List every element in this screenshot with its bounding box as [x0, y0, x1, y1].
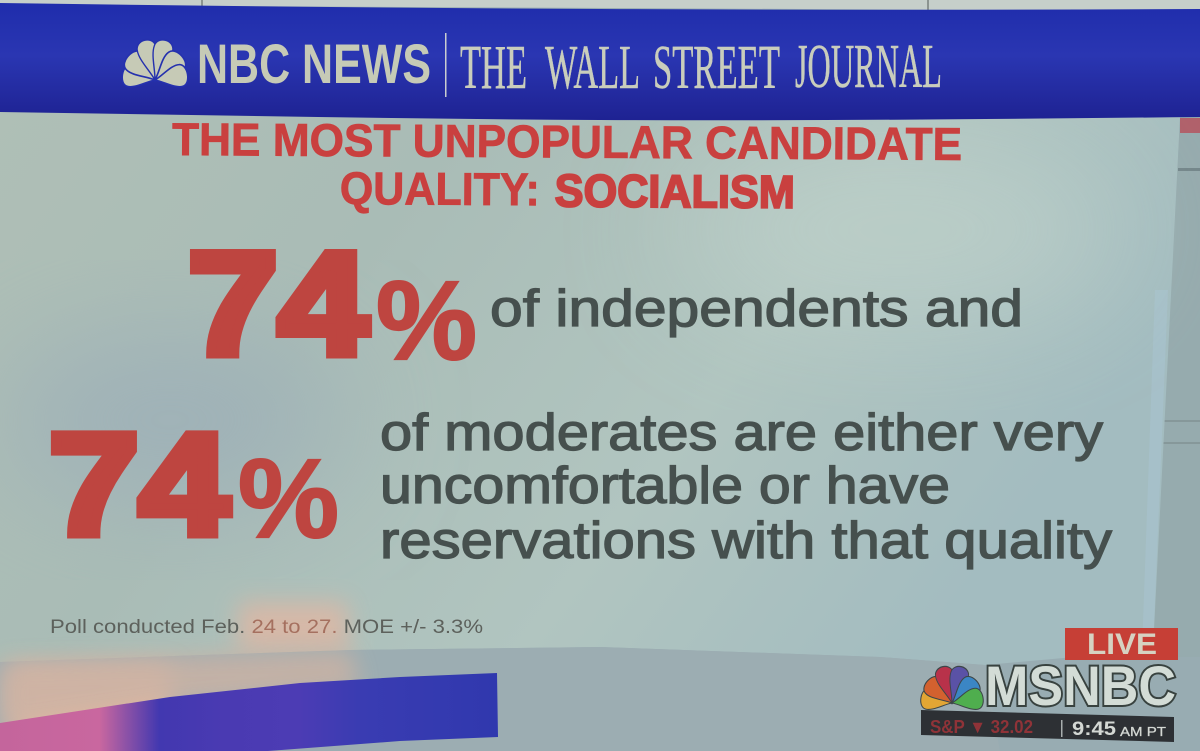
percent sign: %: [238, 436, 339, 561]
logo: The Wall Street Journal: JOURNAL: [795, 33, 942, 101]
wordmark: MSNBC: [985, 654, 1176, 717]
number: 74: [188, 222, 368, 385]
footnote: Poll conducted Feb. 24 to 27. MOE +/- 3.3%: [50, 617, 483, 638]
label: reservations with that quality: [380, 512, 1112, 570]
icon: NBC peacock white: [120, 38, 190, 91]
top wall strip: [0, 0, 1200, 11]
logo: The Wall Street Journal: STREET: [653, 34, 780, 102]
number: 74: [49, 404, 229, 565]
label: of moderates are either very: [380, 404, 1103, 462]
divider: [445, 33, 446, 97]
glare: bright centre: [680, 140, 1120, 320]
label: [380, 404, 1112, 570]
stat: 74% of moderates: [49, 404, 1112, 570]
glare: peach reflection: [238, 602, 348, 652]
right side wall: [1150, 117, 1200, 657]
logo: The Wall Street Journal: THE: [460, 34, 527, 102]
logo: The Wall Street Journal: [460, 33, 942, 102]
logo: MSNBC: [919, 654, 1176, 717]
heading line 1: THE MOST UNPOPULAR CANDIDATE: [172, 113, 962, 170]
glare: blue shade at left: [0, 340, 340, 500]
label: uncomfortable or have: [380, 457, 950, 515]
stock ticker: S&P ▼ 32.02: [930, 717, 1033, 737]
lower blue banner: [0, 673, 498, 751]
heading line 2: QUALITY:: [340, 162, 540, 215]
heading highlight: SOCIALISM: [555, 164, 795, 218]
panel: main graphic board: [0, 111, 1180, 665]
heading: [172, 113, 962, 219]
icon: coloured peacock: [919, 664, 985, 713]
ticker bar: AM PT: [1120, 724, 1166, 739]
logo: NBC NEWS: NBC NEWS: [197, 32, 431, 95]
blue header band: [0, 3, 1200, 120]
clock: 9:45: [1072, 719, 1116, 740]
ticker bar: [921, 710, 1174, 742]
logo: The Wall Street Journal: WALL: [545, 34, 640, 102]
label: of independents and: [490, 280, 1023, 338]
live badge: [1065, 628, 1178, 661]
live badge: LIVE: [1087, 628, 1157, 661]
lower wall peach reflection: [0, 647, 1000, 751]
stat: 74% of independents: [188, 222, 1023, 385]
percent sign: %: [376, 258, 477, 383]
